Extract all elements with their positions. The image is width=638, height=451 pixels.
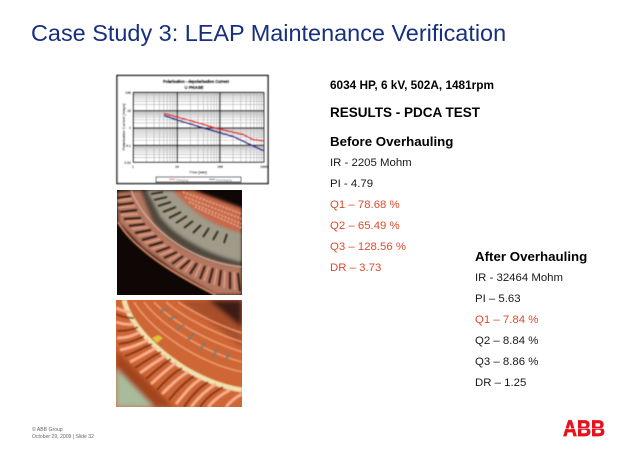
y axis ticks: 10 xyxy=(127,109,131,113)
x axis ticks: 100 xyxy=(217,165,223,169)
y axis label: Polarisation Current [Amps] xyxy=(122,104,126,150)
blue curve xyxy=(164,116,264,151)
Q2 value: Q2 – 8.84 % xyxy=(475,335,538,347)
Q1 value: Q1 – 7.84 % xyxy=(475,314,538,326)
chart legend xyxy=(156,177,241,182)
Q2 value: Q2 – 65.49 % xyxy=(330,220,400,232)
title: Case Study 3: LEAP Maintenance Verification xyxy=(31,20,506,46)
x axis ticks: 1 xyxy=(132,165,134,169)
y axis ticks: 0.1 xyxy=(126,144,131,148)
x axis ticks xyxy=(132,165,268,174)
x axis ticks: 1000 xyxy=(260,165,268,169)
before heading: Before Overhauling xyxy=(330,134,453,149)
photo: winding before overhauling xyxy=(117,190,242,295)
y axis ticks: 0.01 xyxy=(124,161,131,165)
chart: polarization and depolarization currents: Discharging xyxy=(216,178,232,182)
photo: winding after overhauling xyxy=(116,300,242,407)
chart title: Polarisation - depolarisation Current xyxy=(163,79,229,84)
x axis ticks: 10 xyxy=(175,165,179,169)
specification line: 6034 HP, 6 kV, 502A, 1481rpm xyxy=(330,78,494,92)
IR value: IR - 32464 Mohm xyxy=(475,272,563,284)
Q1 value: Q1 – 78.68 % xyxy=(330,199,400,211)
y axis ticks: 100 xyxy=(125,91,131,95)
IR value: IR - 2205 Mohm xyxy=(330,157,412,169)
chart: polarization and depolarization currents: Charging xyxy=(176,178,189,182)
footer text: October 29, 2009 | Slide 32 xyxy=(32,434,94,440)
after heading: After Overhauling xyxy=(475,249,587,264)
after overhauling block xyxy=(475,249,587,389)
DR value: DR – 1.25 xyxy=(475,377,526,389)
DR value: DR – 3.73 xyxy=(330,262,381,274)
chart: polarization and depolarization currents: U PHASE xyxy=(184,85,204,90)
chart: polarization and depolarization currents xyxy=(115,74,270,185)
results heading: RESULTS - PDCA TEST xyxy=(330,105,480,120)
before overhauling block xyxy=(330,134,453,274)
y axis ticks xyxy=(124,91,131,165)
footer text: © ABB Group xyxy=(32,427,63,433)
red curve xyxy=(164,114,264,141)
footer text xyxy=(32,427,94,440)
x axis ticks: Time [min] xyxy=(189,170,207,174)
PI value: PI – 5.63 xyxy=(475,293,521,305)
PI value: PI - 4.79 xyxy=(330,178,373,190)
Q3 value: Q3 – 8.86 % xyxy=(475,356,538,368)
Q3 value: Q3 – 128.56 % xyxy=(330,241,406,253)
y axis ticks: 1 xyxy=(129,126,131,130)
